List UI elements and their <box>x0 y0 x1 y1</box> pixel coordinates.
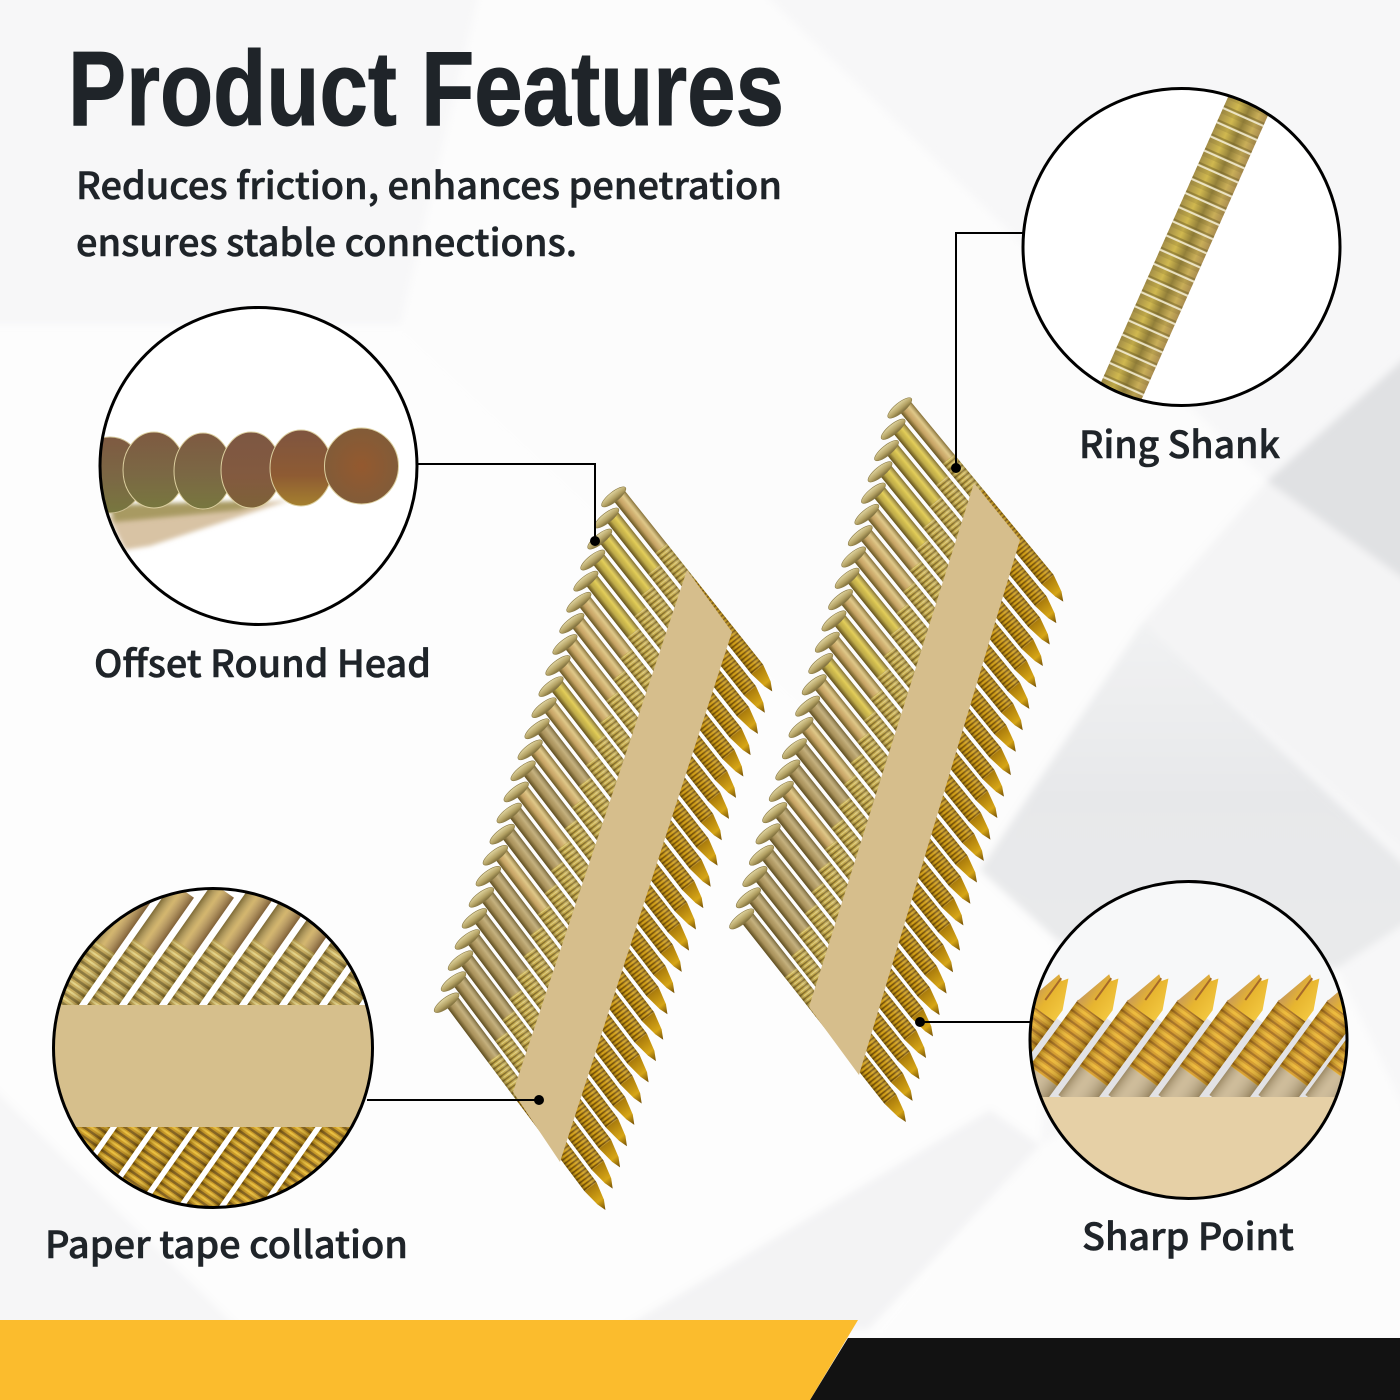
nail strip left <box>432 484 782 1221</box>
label: ring shank: Ring Shank <box>1079 415 1280 469</box>
right strip paper tape <box>809 483 1020 1075</box>
callout line: sharp point <box>915 1017 1030 1027</box>
footer yellow band <box>0 1320 858 1400</box>
callout line: ring shank <box>951 233 1023 473</box>
circle: ring shank <box>1023 86 1340 414</box>
label: offset round head: Offset Round Head <box>94 634 431 688</box>
title: Product Features <box>68 30 784 148</box>
callout line: offset round head <box>418 464 600 546</box>
subtitle text: Reduces friction, enhances penetration <box>76 156 782 210</box>
subtitle text <box>76 156 782 267</box>
callout line: paper tape <box>367 1095 544 1105</box>
right strip nails <box>727 395 1073 1133</box>
footer black band <box>810 1338 1400 1400</box>
circle: offset round head <box>76 308 417 624</box>
label: sharp point: Sharp Point <box>1082 1207 1294 1261</box>
circle: sharp point <box>1028 880 1348 1200</box>
left strip paper tape <box>513 570 732 1162</box>
nail strip right <box>727 395 1073 1133</box>
left strip nails <box>432 484 782 1221</box>
circle: paper tape collation <box>52 887 374 1209</box>
label: paper tape collation: Paper tape collation <box>45 1215 408 1269</box>
subtitle text: ensures stable connections. <box>76 213 577 267</box>
